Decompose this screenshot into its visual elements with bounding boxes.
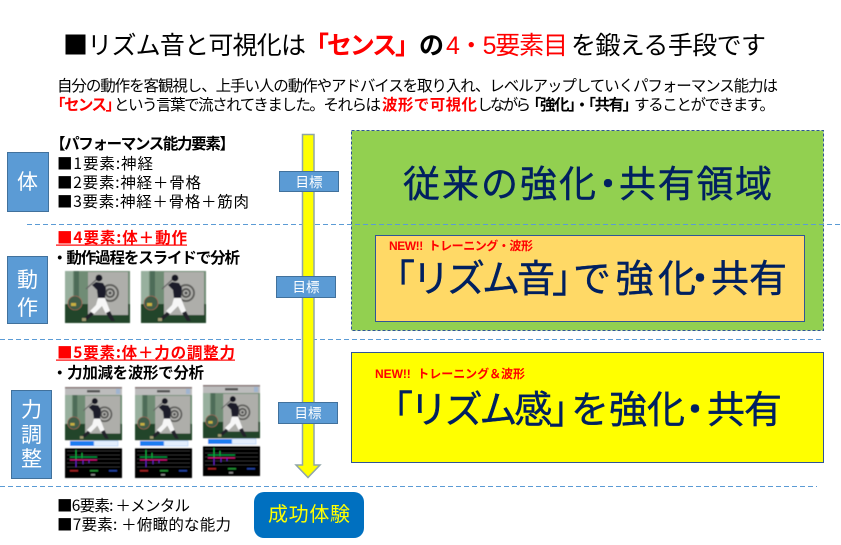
text block: performance elements 1-3: ■2要素:神経＋骨格 <box>57 171 201 193</box>
category box: force adjustment <box>12 390 52 478</box>
orange panel: rhythm sound <box>376 236 804 322</box>
intro text: 自分の動作を客観視し、上手い人の動作やアドバイスを取り入れ、レベルアップしていくパフォーマンス能力は <box>57 77 778 95</box>
title: 「センス」 <box>304 32 420 60</box>
intro text: 波形で可視化 <box>382 96 477 114</box>
text block: element 5: ・力加減を波形で分析 <box>52 363 204 382</box>
green panel: conventional area: ・ <box>590 164 626 205</box>
yellow panel: rhythm feel: 「リズム感」 <box>375 390 587 432</box>
yellow panel: rhythm feel: NEW!! トレーニング＆波形 <box>375 366 525 381</box>
success badge: 成功体験 <box>268 503 350 526</box>
text block: performance elements 1-3: 【パフォーマンス能力要素】 <box>50 134 235 153</box>
app screenshots with waveforms <box>65 385 260 478</box>
text block: element 5: ■5要素:体＋力の調整力 <box>57 341 235 363</box>
orange panel: rhythm sound: ・ <box>681 259 719 301</box>
goal label 2: 目標 <box>292 280 320 295</box>
intro text: 「強化」・「共有」 <box>526 96 638 114</box>
intro text: 「センス」 <box>50 96 121 114</box>
text block: element 4: ・動作過程をスライドで分析 <box>52 248 240 267</box>
goal label 3: 目標 <box>294 406 322 421</box>
photos: swing slide frames <box>65 271 206 323</box>
goal label 2 <box>276 276 336 298</box>
goal label 3 <box>278 402 338 424</box>
text block: element 5 <box>52 341 235 382</box>
green panel: conventional area: 従来の強化 <box>403 164 596 205</box>
category box: force adjustment: 力 <box>21 399 42 422</box>
orange panel: rhythm sound: NEW!! トレーニング・波形 <box>389 238 533 253</box>
title <box>63 26 766 62</box>
title: を鍛える手段です <box>571 32 766 60</box>
yellow panel: rhythm feel: 共有 <box>707 390 782 432</box>
category box: motion <box>8 256 48 324</box>
title: の <box>419 32 444 60</box>
green panel: conventional area <box>352 130 824 330</box>
category box: force adjustment: 整 <box>21 448 42 471</box>
category box: body <box>8 152 48 212</box>
goal label 1: 目標 <box>296 175 323 190</box>
goal label 1 <box>280 172 338 192</box>
dashed row dividers <box>0 224 841 486</box>
arrow: progress downward <box>296 134 320 478</box>
orange panel: rhythm sound: で強化 <box>573 259 696 301</box>
title: 4・5要素目 <box>446 32 568 60</box>
success badge <box>254 492 364 538</box>
category box: motion: 動 <box>17 269 38 292</box>
orange panel: rhythm sound: 「リズム音」 <box>377 259 590 301</box>
yellow panel: rhythm feel: ・ <box>676 390 714 432</box>
intro text: しながら <box>477 96 531 114</box>
text block: performance elements 1-3: ■3要素:神経＋骨格＋筋肉 <box>57 190 249 212</box>
text block: elements 6-7: ■7要素: ＋俯瞰的な能力 <box>57 513 231 535</box>
intro text: という言葉で流されてきました。それらは <box>114 96 381 114</box>
title: ■リズム音と可視化は <box>63 26 306 62</box>
category box: body: 体 <box>17 171 38 194</box>
text block: element 4 <box>52 226 240 267</box>
intro text: することができます。 <box>634 96 775 114</box>
category box: force adjustment: 調 <box>21 424 42 447</box>
yellow panel: rhythm feel <box>352 352 824 462</box>
text block: elements 6-7 <box>57 494 231 535</box>
text block: performance elements 1-3: ■1要素:神経 <box>57 152 153 174</box>
orange panel: rhythm sound: 共有 <box>711 259 787 301</box>
yellow panel: rhythm feel: を強化 <box>571 390 685 432</box>
green panel: conventional area: 共有領域 <box>619 164 772 205</box>
text block: performance elements 1-3 <box>50 134 249 212</box>
intro text <box>50 77 778 114</box>
category box: motion: 作 <box>17 297 38 320</box>
text block: elements 6-7: ■6要素: ＋メンタル <box>57 494 190 516</box>
text block: element 4: ■4要素:体＋動作 <box>57 226 187 248</box>
